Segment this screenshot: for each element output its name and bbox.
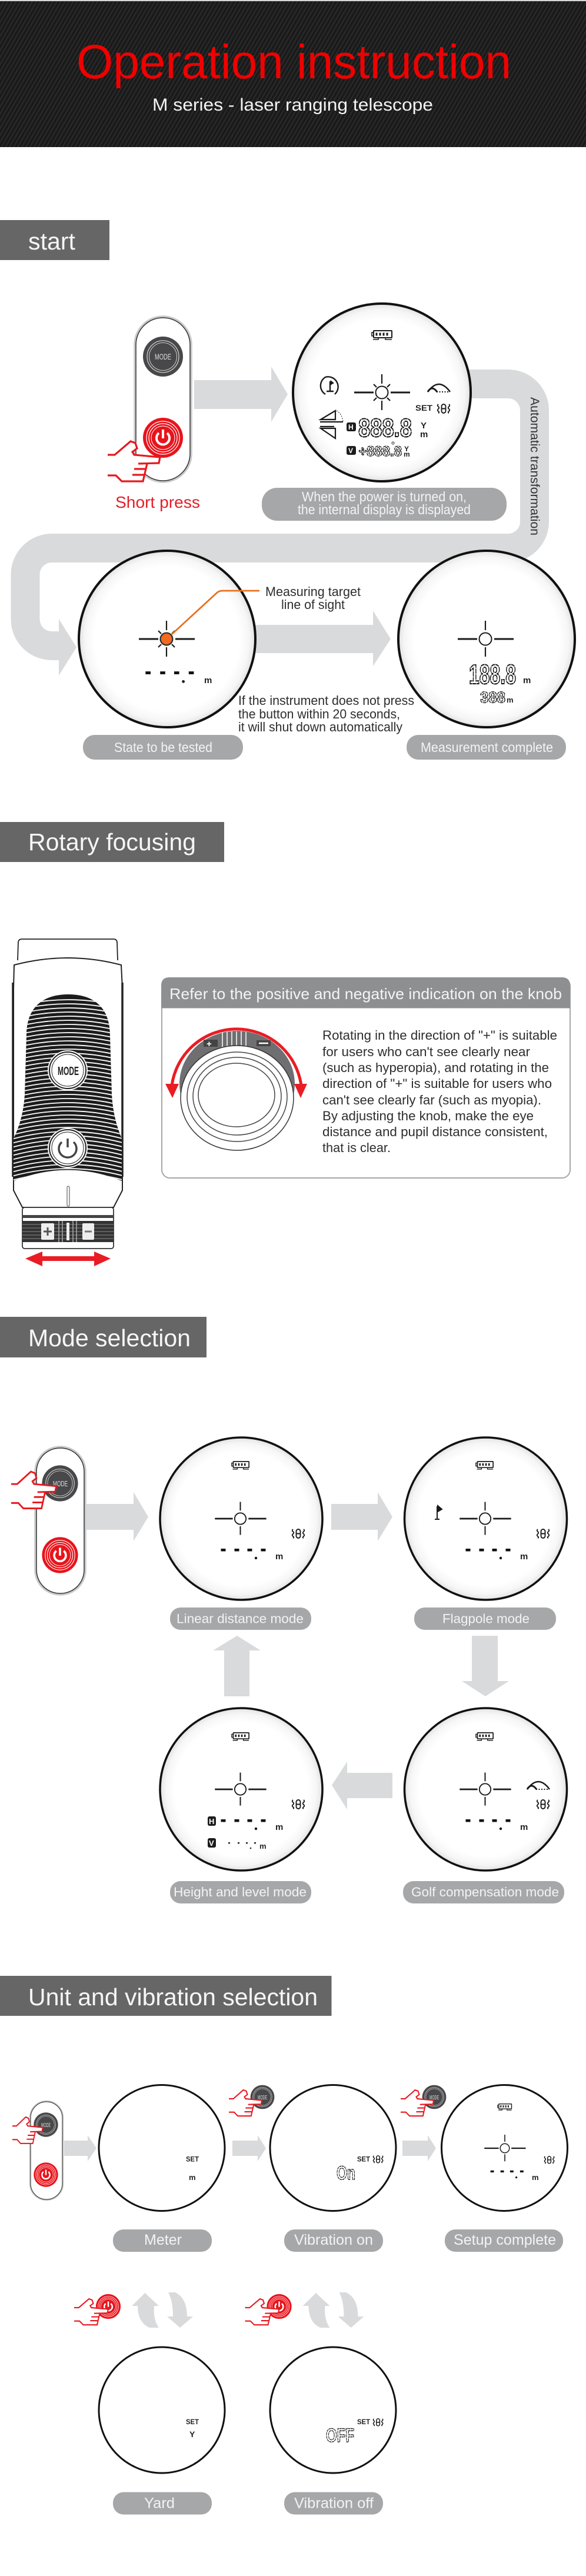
button with hand: next: MODE bbox=[429, 2095, 439, 2101]
section heading: rotary focusing: Rotary focusing bbox=[28, 828, 196, 856]
lens: measurement complete bbox=[398, 551, 575, 727]
readout: off: OFF bbox=[326, 2425, 354, 2446]
icon: pressing hand bbox=[12, 2117, 43, 2144]
unit: m: m bbox=[520, 1822, 528, 1832]
readout: secondary digits: ÷888.8 bbox=[359, 444, 402, 460]
icon: vibration bbox=[292, 1529, 304, 1538]
icon: H badge: H bbox=[348, 423, 354, 431]
icon: V badge: V bbox=[209, 1839, 214, 1848]
device: rangefinder body bbox=[12, 939, 125, 1249]
arrow: toggle down bbox=[338, 2292, 364, 2328]
unit: m: m bbox=[420, 430, 428, 440]
label: set: SET bbox=[186, 2156, 199, 2163]
arrow: meter to vibration on bbox=[232, 2135, 266, 2161]
lens: golf compensation mode bbox=[405, 1708, 567, 1871]
lens: linear distance mode bbox=[160, 1437, 322, 1600]
icon: pressing hand bbox=[74, 2299, 108, 2325]
diagram: eyepiece knob bbox=[165, 1029, 307, 1150]
arrow: vibration on to setup complete bbox=[402, 2135, 436, 2161]
caption pill: height and level mode: Height and level mode bbox=[174, 1885, 307, 1899]
readout: dashes bbox=[466, 1549, 511, 1559]
caption pill: flagpole mode bbox=[414, 1607, 556, 1630]
unit: m: m bbox=[523, 675, 531, 685]
focus knob bbox=[22, 1207, 114, 1249]
diagram: eyepiece knob: + bbox=[207, 1039, 212, 1049]
unit: m: m bbox=[204, 675, 212, 685]
explanation text: can't see clearly far (such as myopia). bbox=[322, 1093, 541, 1107]
icon: battery bbox=[232, 1462, 249, 1469]
readout: dashes bbox=[491, 2171, 524, 2178]
arrow: device to meter bbox=[64, 2135, 96, 2161]
panel title: Refer to the positive and negative indication on the knob bbox=[169, 985, 562, 1003]
button: mode: MODE bbox=[53, 1479, 68, 1488]
unit: m: m bbox=[275, 1822, 283, 1832]
icon: V badge: V bbox=[348, 447, 353, 455]
icon: battery bbox=[476, 1462, 493, 1469]
icon: crosshair bbox=[215, 1772, 267, 1806]
icon: height triangles bbox=[320, 411, 343, 438]
readout: main digits: 888.8 bbox=[358, 414, 412, 442]
header band bbox=[0, 0, 586, 147]
icon: vibration bbox=[292, 1800, 304, 1809]
device: buttons with short press bbox=[108, 317, 191, 482]
device: press mode button small bbox=[12, 2101, 63, 2200]
callout text bbox=[265, 584, 361, 612]
icon: golf arc bbox=[428, 384, 450, 392]
caption pill: power on: the internal display is displayed bbox=[298, 502, 471, 517]
icon: battery bbox=[232, 1733, 249, 1740]
label: set: SET bbox=[357, 2156, 370, 2163]
caption pill: vibration off: Vibration off bbox=[294, 2495, 374, 2511]
caption pill: meter: Meter bbox=[144, 2232, 182, 2248]
unit: Y: Y bbox=[189, 2429, 195, 2439]
icon: crosshair with rays bbox=[354, 374, 410, 410]
section heading: mode selection: Mode selection bbox=[28, 1324, 191, 1352]
label: set: SET bbox=[186, 2419, 199, 2426]
grip ribs bbox=[12, 991, 125, 1186]
callout line bbox=[172, 591, 259, 634]
icon: vibration bbox=[438, 404, 450, 413]
caption pill: measurement complete bbox=[407, 735, 566, 760]
icon: vibration bbox=[373, 2156, 383, 2163]
explanation text: distance and pupil distance consistent, bbox=[322, 1124, 548, 1139]
arrow: rotation arc bbox=[165, 1029, 307, 1098]
caption pill: setup complete bbox=[445, 2229, 563, 2252]
section heading: start bbox=[0, 220, 109, 260]
section heading: start: start bbox=[28, 228, 76, 255]
note: auto shut down bbox=[238, 693, 414, 734]
section heading: rotary focusing bbox=[0, 822, 224, 862]
loop label: Automatic transformation bbox=[528, 397, 541, 535]
unit: small m: m bbox=[507, 695, 514, 704]
lens: full internal display bbox=[293, 304, 471, 481]
power press with toggle arrows: yard bbox=[74, 2292, 193, 2328]
section heading: unit and vibration selection: Unit and vibration selection bbox=[28, 1983, 318, 2011]
note: auto shut down: If the instrument does not press bbox=[238, 693, 414, 708]
device: press mode button bbox=[11, 1447, 85, 1595]
button: mode: MODE bbox=[155, 352, 171, 361]
button: mode: MODE bbox=[58, 1065, 79, 1078]
section heading: mode selection bbox=[0, 1317, 207, 1357]
caption pill: vibration on: Vibration on bbox=[294, 2232, 373, 2248]
caption pill: power on bbox=[262, 488, 507, 521]
icon: H badge: H bbox=[209, 1817, 214, 1826]
arrow: automatic transformation loop bbox=[25, 384, 541, 675]
readout: dashes bbox=[221, 1819, 266, 1830]
title: Operation instruction bbox=[76, 35, 511, 89]
lens: vibration on bbox=[270, 2085, 396, 2211]
icon: pressing hand bbox=[11, 1472, 56, 1509]
unit: small Y: Y bbox=[404, 445, 409, 453]
readout: dashes bbox=[145, 671, 194, 683]
unit: Y: Y bbox=[421, 421, 427, 431]
lens: vibration off bbox=[270, 2347, 396, 2473]
arrow: toggle up bbox=[302, 2293, 329, 2328]
caption pill: flagpole mode: Flagpole mode bbox=[442, 1611, 530, 1626]
button: power bbox=[42, 1537, 78, 1573]
subtitle: M series - laser ranging telescope bbox=[152, 95, 433, 115]
icon: crosshair bbox=[458, 621, 514, 657]
callout text: line of sight bbox=[281, 597, 345, 612]
icon: crosshair bbox=[460, 1502, 511, 1535]
icon: crosshair bbox=[484, 2135, 526, 2161]
explanation text: Rotating in the direction of "+" is suitable bbox=[322, 1028, 557, 1043]
lens: height and level mode bbox=[160, 1708, 322, 1871]
caption pill: linear distance mode bbox=[170, 1607, 311, 1630]
icon: golf arc bbox=[527, 1782, 550, 1789]
button: power bbox=[48, 1128, 88, 1168]
readout: dashes bbox=[466, 1819, 511, 1830]
icon: crosshair bbox=[460, 1772, 511, 1806]
icon: vibration bbox=[537, 1529, 549, 1538]
button with hand: next bbox=[229, 2085, 274, 2116]
button: power bbox=[143, 418, 183, 458]
caption pill: power on: When the power is turned on, bbox=[302, 489, 467, 504]
readout: dashes bbox=[221, 1549, 266, 1559]
icon: pressing hand bbox=[245, 2299, 279, 2325]
caption pill: yard: Yard bbox=[144, 2495, 175, 2511]
arrow: press to display bbox=[194, 367, 288, 422]
label: set: SET bbox=[357, 2419, 370, 2426]
caption pill: yard bbox=[113, 2492, 212, 2515]
button: mode bbox=[34, 2112, 58, 2137]
icon: battery bbox=[372, 331, 392, 340]
panel header bbox=[161, 977, 570, 1009]
lens: state to be tested bbox=[79, 551, 255, 727]
arrow: height back to linear bbox=[213, 1636, 261, 1696]
readout: distance: 188.8 bbox=[469, 659, 516, 690]
button with hand: next bbox=[401, 2085, 446, 2116]
explanation text bbox=[322, 1028, 557, 1155]
icon: flag bbox=[321, 377, 338, 394]
icon: pressing hand bbox=[108, 441, 160, 481]
section heading: unit and vibration selection bbox=[0, 1976, 332, 2016]
arrow: device to linear mode bbox=[86, 1492, 148, 1541]
arrow: to measurement bbox=[253, 611, 391, 666]
arrow: toggle up bbox=[132, 2293, 159, 2328]
lens: flagpole mode bbox=[405, 1437, 567, 1600]
button: power bbox=[34, 2162, 58, 2187]
panel: knob indication bbox=[161, 977, 570, 1178]
icon: pressing hand bbox=[401, 2090, 434, 2116]
caption pill: height and level mode bbox=[170, 1881, 311, 1903]
icon: vibration bbox=[373, 2419, 383, 2426]
icon: battery bbox=[476, 1733, 493, 1740]
unit: small m: m bbox=[259, 1842, 267, 1851]
explanation text: By adjusting the knob, make the eye bbox=[322, 1109, 534, 1123]
power press with toggle arrows: vibration off bbox=[245, 2292, 364, 2328]
icon: V badge bbox=[208, 1838, 216, 1848]
caption pill: linear distance mode: Linear distance mode bbox=[177, 1611, 304, 1626]
caption pill: state to be tested: State to be tested bbox=[114, 740, 212, 755]
readout: secondary: 388 bbox=[480, 688, 505, 706]
lens: setup complete bbox=[441, 2085, 567, 2211]
icon: H badge bbox=[208, 1816, 216, 1826]
icon: vibration bbox=[544, 2156, 554, 2164]
arrow: golf to height bbox=[332, 1762, 392, 1809]
arrow: flagpole to golf bbox=[462, 1636, 509, 1696]
icon: battery bbox=[498, 2104, 512, 2110]
unit: m: m bbox=[189, 2173, 196, 2182]
icon: H badge bbox=[347, 422, 356, 431]
icon: flag bbox=[435, 1506, 442, 1519]
icon: crosshair bbox=[215, 1502, 267, 1535]
note: auto shut down: it will shut down automatically bbox=[238, 720, 402, 734]
unit: small m: m bbox=[404, 450, 410, 458]
caption pill: vibration off bbox=[284, 2492, 383, 2515]
button with hand: next: MODE bbox=[258, 2095, 267, 2101]
caption pill: state to be tested bbox=[83, 735, 243, 760]
caption pill: meter bbox=[113, 2229, 212, 2252]
button: mode bbox=[42, 1465, 78, 1502]
label: short press: Short press bbox=[115, 493, 200, 511]
caption pill: golf compensation mode: Golf compensation mode bbox=[411, 1885, 559, 1899]
readout: small dashes bbox=[228, 1842, 256, 1849]
arrow: linear to flagpole bbox=[331, 1492, 392, 1541]
explanation text: (such as hyperopia), and rotating in the bbox=[322, 1060, 549, 1075]
icon: pressing hand bbox=[229, 2090, 262, 2116]
unit: m: m bbox=[520, 1552, 528, 1562]
caption pill: setup complete: Setup complete bbox=[454, 2232, 556, 2248]
tick mark bbox=[67, 1186, 69, 1206]
arrow: toggle down bbox=[167, 2292, 193, 2328]
caption pill: measurement complete: Measurement complete bbox=[421, 740, 553, 755]
lens: meter bbox=[99, 2085, 225, 2211]
label: set: SET bbox=[415, 403, 432, 412]
explanation text: that is clear. bbox=[322, 1140, 391, 1155]
explanation text: direction of "+" is suitable for users who bbox=[322, 1076, 552, 1091]
readout: on: On bbox=[337, 2162, 355, 2184]
icon: vibration bbox=[537, 1800, 549, 1809]
button: mode bbox=[48, 1050, 88, 1090]
icon: V badge bbox=[347, 446, 356, 455]
icon: crosshair with orange target bbox=[139, 621, 195, 657]
callout text: Measuring target bbox=[265, 584, 361, 599]
button: mode: MODE bbox=[41, 2122, 51, 2129]
button: mode bbox=[143, 337, 183, 377]
unit: m: m bbox=[275, 1552, 283, 1562]
lens: yard bbox=[99, 2347, 225, 2473]
unit: m: m bbox=[532, 2173, 539, 2182]
caption pill: golf compensation mode bbox=[403, 1881, 564, 1903]
explanation text: for users who can't see clearly near bbox=[322, 1044, 530, 1059]
note: auto shut down: the button within 20 seconds, bbox=[238, 707, 400, 721]
degree sign bbox=[392, 442, 394, 444]
arrow: knob rotation direction bbox=[25, 1252, 111, 1266]
caption pill: vibration on bbox=[284, 2229, 383, 2252]
